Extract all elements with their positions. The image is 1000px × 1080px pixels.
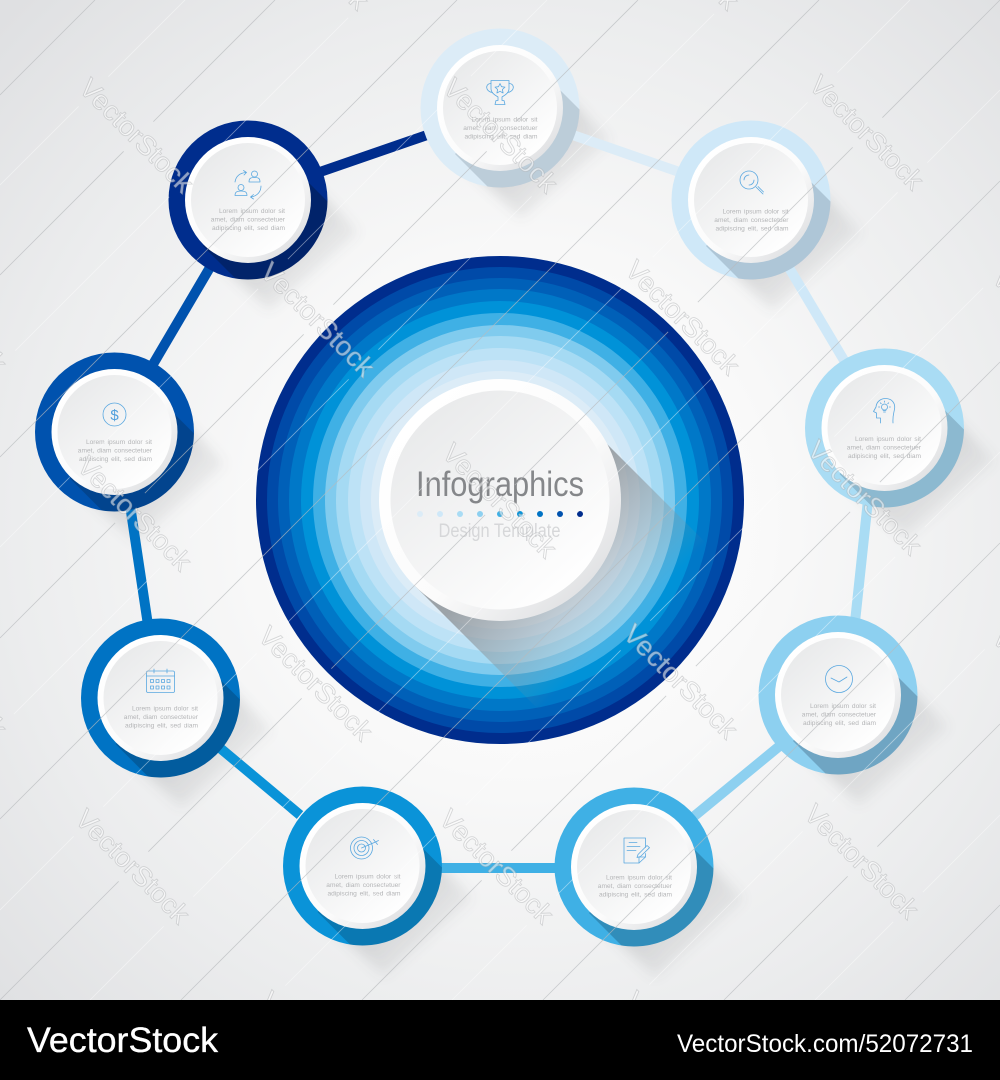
VectorStock watermarks: VectorStock	[433, 804, 560, 930]
text block	[463, 116, 538, 140]
icon: magnifier	[740, 171, 764, 194]
colour dots	[417, 511, 583, 517]
icon: dollar	[103, 403, 126, 426]
connector lines	[130, 134, 868, 868]
central title disc	[379, 379, 621, 621]
text block	[802, 703, 877, 727]
text block: amet, diam consectetuer	[78, 448, 153, 454]
VectorStock watermarks: VectorStock	[437, 73, 564, 199]
text block	[847, 436, 922, 460]
text block: amet, diam consectetuer	[598, 883, 673, 890]
VectorStock watermarks: VectorStock	[254, 257, 381, 383]
node 4: clock	[758, 616, 918, 774]
text block: Lorem ipsum dolor sit	[810, 703, 876, 710]
node 8: dollar	[35, 352, 194, 512]
text block: amet, diam consectetuer	[847, 444, 922, 452]
central concentric ring chart	[256, 256, 744, 744]
VectorStock watermarks: VectorStock	[252, 621, 379, 747]
icon: dollar: $	[110, 407, 119, 424]
text block: amet, diam consectetuer	[802, 712, 877, 718]
VectorStock watermarks: VectorStock	[798, 799, 925, 925]
text block: adipiscing elit, sed diam	[599, 892, 672, 898]
node 7: calendar	[81, 618, 240, 778]
node 6: target	[283, 786, 442, 946]
text block: amet, diam consectetuer	[124, 714, 199, 721]
VectorStock watermarks: VectorStock	[801, 435, 928, 561]
footer bar	[0, 1000, 1000, 1080]
VectorStock watermarks: VectorStock	[73, 73, 200, 199]
central long shadow	[414, 444, 700, 704]
VectorStock watermarks: VectorStock	[617, 619, 744, 745]
text block: adipiscing elit, sed diam	[715, 226, 789, 232]
node 2: magnifier	[672, 120, 830, 280]
icon: head with bulb	[874, 398, 895, 423]
VectorStock watermarks: VectorStock	[69, 804, 196, 930]
icon: people exchange	[235, 170, 261, 199]
node 3: head with idea bulb	[805, 348, 964, 508]
text block: Lorem ipsum dolor sit	[606, 874, 672, 882]
text block: adipiscing elit, sed diam	[803, 720, 876, 727]
subheading: Design Template: Design Template	[438, 521, 560, 542]
text block: Lorem ipsum dolor sit	[471, 116, 538, 124]
VectorStock watermarks: VectorStock	[71, 451, 198, 577]
text block	[124, 706, 199, 730]
text block: Lorem ipsum dolor sit	[132, 706, 198, 712]
icon: note and pen	[624, 838, 650, 863]
text block: adipiscing elit, sed diam	[327, 890, 401, 898]
text block: amet, diam consectetuer	[714, 217, 789, 224]
text block: Lorem ipsum dolor sit	[855, 436, 921, 443]
heading: Infographics: Infographics	[416, 465, 584, 504]
text block	[598, 874, 673, 898]
text block: Lorem ipsum dolor sit	[722, 208, 789, 216]
text block: amet, diam consectetuer	[463, 125, 538, 132]
footer logo text: VectorStock	[27, 1021, 219, 1060]
icon: trophy	[487, 80, 513, 104]
text block	[714, 208, 789, 232]
footer image id: VectorStock.com/52072731	[677, 1030, 973, 1058]
text block: adipiscing elit, sed diam	[848, 453, 921, 460]
text block: adipiscing elit, sed diam	[125, 722, 198, 730]
text block: amet, diam consectetuer	[326, 882, 401, 889]
text block	[326, 874, 401, 898]
text block: adipiscing elit, sed diam	[464, 134, 538, 140]
icon: target	[350, 837, 378, 859]
node 9: people exchange	[168, 120, 328, 280]
VectorStock watermarks: VectorStock	[619, 255, 746, 381]
node 1: trophy	[420, 28, 580, 188]
text block	[78, 439, 153, 463]
text block: adipiscing elit, sed diam	[212, 225, 285, 232]
text block: Lorem ipsum dolor sit	[219, 208, 285, 215]
text block	[211, 208, 286, 232]
icon: calendar	[146, 669, 174, 692]
node 5: note and pen	[554, 788, 714, 946]
VectorStock watermarks: VectorStock	[436, 438, 563, 564]
text block: Lorem ipsum dolor sit	[86, 439, 152, 446]
text block: Lorem ipsum dolor sit	[334, 874, 401, 880]
icon: clock	[826, 666, 852, 692]
text block: adipiscing elit, sed diam	[79, 456, 152, 463]
soft node shadows on background	[70, 70, 994, 977]
text block: amet, diam consectetuer	[211, 216, 286, 224]
VectorStock watermarks: VectorStock	[803, 70, 930, 196]
